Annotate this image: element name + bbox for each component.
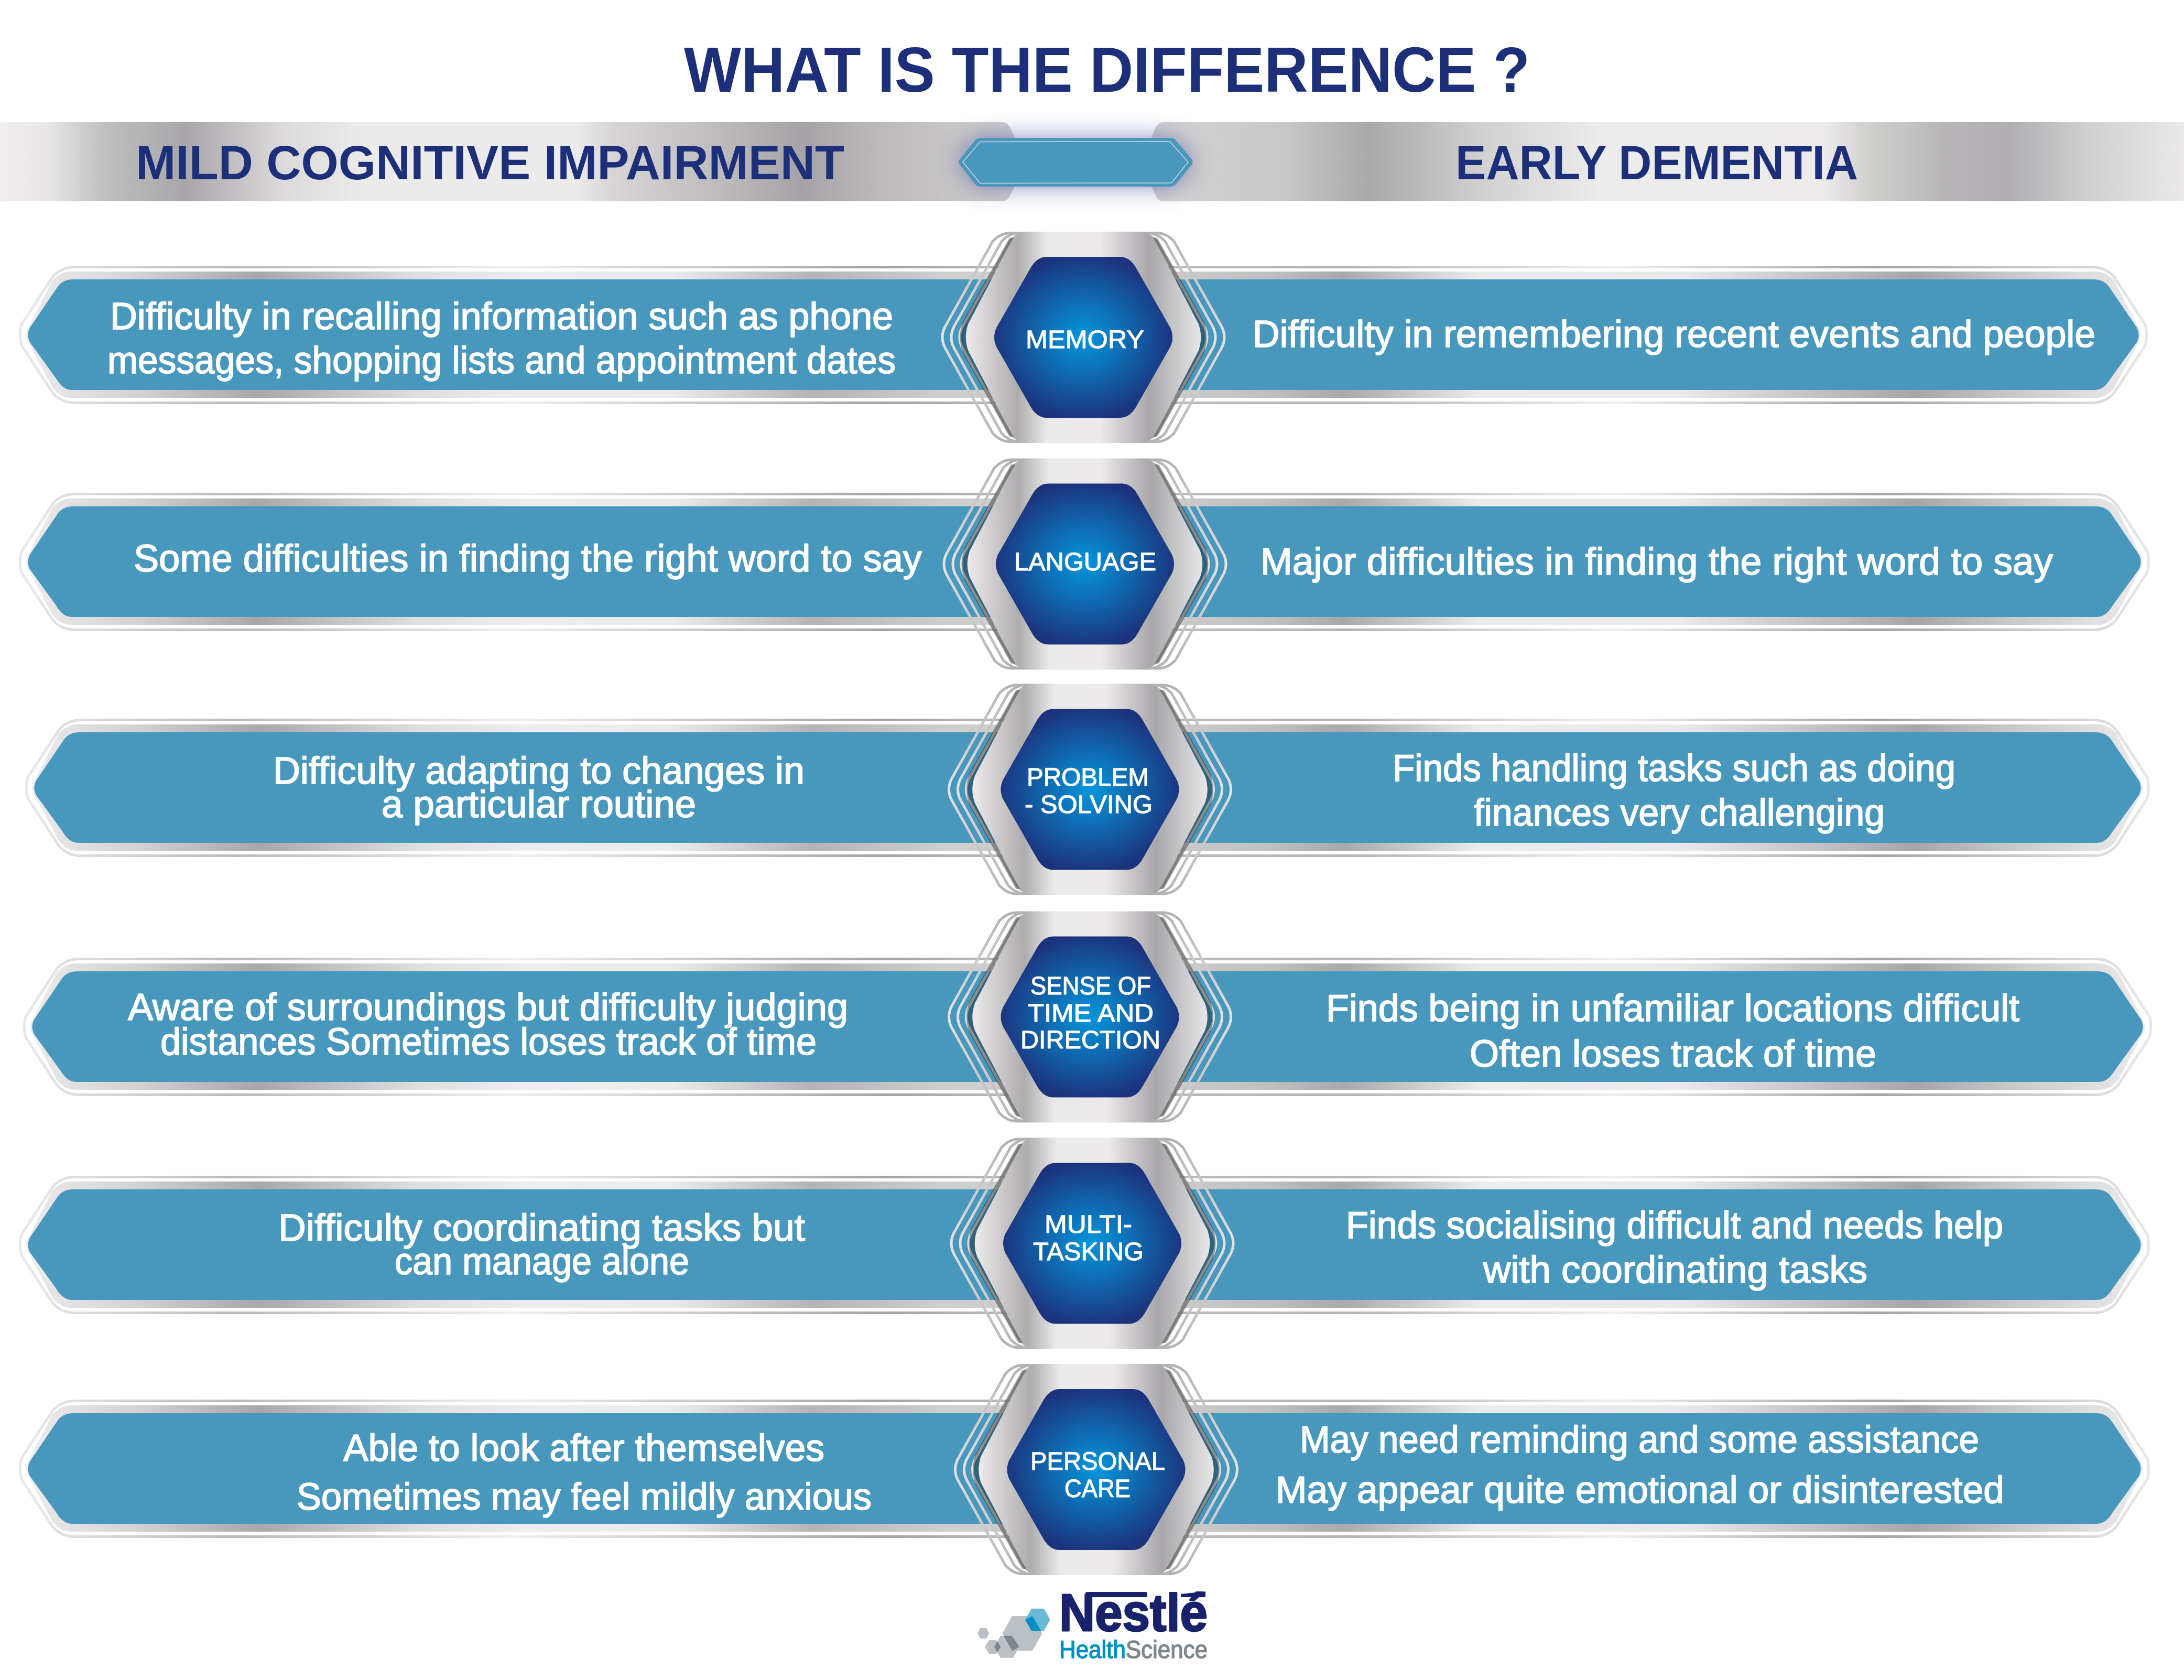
dementia text: with coordinating tasks (1483, 1249, 1867, 1291)
comparison bar (26, 720, 2149, 855)
mild text: Difficulty in recalling information such as phone (110, 296, 893, 338)
hexagon: personal care: CARE (1064, 1475, 1131, 1503)
mild text: Difficulty adapting to changes in (273, 750, 805, 792)
hexagon: personal care: PERSONAL (1030, 1448, 1165, 1476)
dementia text: Finds handling tasks such as doing (1393, 747, 1955, 789)
wordmark: HealthScience: HealthScience (1059, 1635, 1208, 1663)
mild text: Difficulty coordinating tasks but (278, 1207, 805, 1249)
hexagon: language (944, 458, 1226, 670)
hexagon: memory (942, 232, 1224, 443)
dementia text: finances very challenging (1474, 792, 1885, 834)
mild text: a particular routine (382, 784, 696, 826)
mild text: messages, shopping lists and appointment dates (107, 340, 896, 382)
title: WHAT IS THE DIFFERENCE ? (684, 34, 1530, 105)
dementia text: May appear quite emotional or disinterested (1276, 1469, 2004, 1511)
mild text (278, 1207, 805, 1283)
dementia text: May need reminding and some assistance (1300, 1419, 1979, 1461)
header band (0, 122, 2184, 201)
mild text: Aware of surroundings but difficulty judging (128, 987, 848, 1028)
row: sense of time and direction (24, 911, 2151, 1123)
hexagon: problem solving: - SOLVING (1025, 791, 1153, 819)
hexagon: sense of time and direction: SENSE OF (1030, 972, 1151, 1000)
row: multi-tasking (20, 1137, 2149, 1349)
comparison bar (20, 267, 2147, 403)
hexagon: personal care (955, 1364, 1237, 1575)
comparison bar (24, 959, 2151, 1094)
row: personal care (20, 1364, 2149, 1575)
comparison bar (20, 494, 2149, 630)
hexagon: problem solving: PROBLEM (1027, 764, 1149, 792)
centre badge (959, 138, 1193, 187)
mild text (273, 750, 805, 826)
dementia text: Finds socialising difficult and needs help (1346, 1205, 2003, 1247)
dementia text: Major difficulties in finding the right word to say (1261, 541, 2053, 583)
heading: mild cognitive impairment: MILD COGNITIVE IMPAIRMENT (136, 136, 844, 190)
dementia text: Finds being in unfamiliar locations difficult (1326, 988, 2019, 1029)
mild text: Able to look after themselves (343, 1427, 824, 1469)
hexagon: sense of time and direction (949, 911, 1231, 1123)
mild text: can manage alone (395, 1241, 689, 1283)
dementia text (1346, 1205, 2003, 1291)
right silver band (1145, 122, 2184, 201)
dementia text (1276, 1419, 2004, 1511)
comparison bar (20, 1401, 2149, 1537)
dementia text (1326, 988, 2019, 1075)
row: problem solving (26, 684, 2149, 895)
row: language (20, 458, 2149, 670)
row: memory (20, 232, 2147, 443)
hexagon: memory: MEMORY (1026, 326, 1144, 354)
mild text (297, 1427, 872, 1518)
left silver band (0, 122, 1022, 201)
dementia text: Difficulty in remembering recent events and people (1253, 313, 2095, 355)
icon: hexagon cluster (977, 1609, 1050, 1658)
wordmark: Nestlé: Nestlé (1059, 1584, 1208, 1642)
hexagon: sense of time and direction: TIME AND (1028, 1000, 1154, 1027)
comparison bar (20, 1177, 2149, 1313)
hexagon: multi-tasking: MULTI- (1045, 1211, 1132, 1239)
hexagon: sense of time and direction: DIRECTION (1020, 1026, 1160, 1054)
centre badge glow (958, 138, 1193, 187)
hexagon: multi-tasking (951, 1137, 1233, 1349)
dementia text (1393, 747, 1955, 834)
heading: early dementia: EARLY DEMENTIA (1455, 136, 1858, 190)
dementia text: Often loses track of time (1470, 1033, 1876, 1075)
mild text: Some difficulties in finding the right word to say (134, 538, 922, 580)
mild text: Sometimes may feel mildly anxious (297, 1476, 872, 1518)
mild text (128, 987, 848, 1063)
logo: Nestlé Health Science (977, 1584, 1208, 1663)
mild text: distances Sometimes loses track of time (160, 1021, 817, 1063)
hexagon: problem solving (949, 684, 1231, 895)
mild text (107, 296, 896, 382)
hexagon: multi-tasking: TASKING (1033, 1238, 1144, 1266)
hexagon: language: LANGUAGE (1014, 548, 1156, 576)
